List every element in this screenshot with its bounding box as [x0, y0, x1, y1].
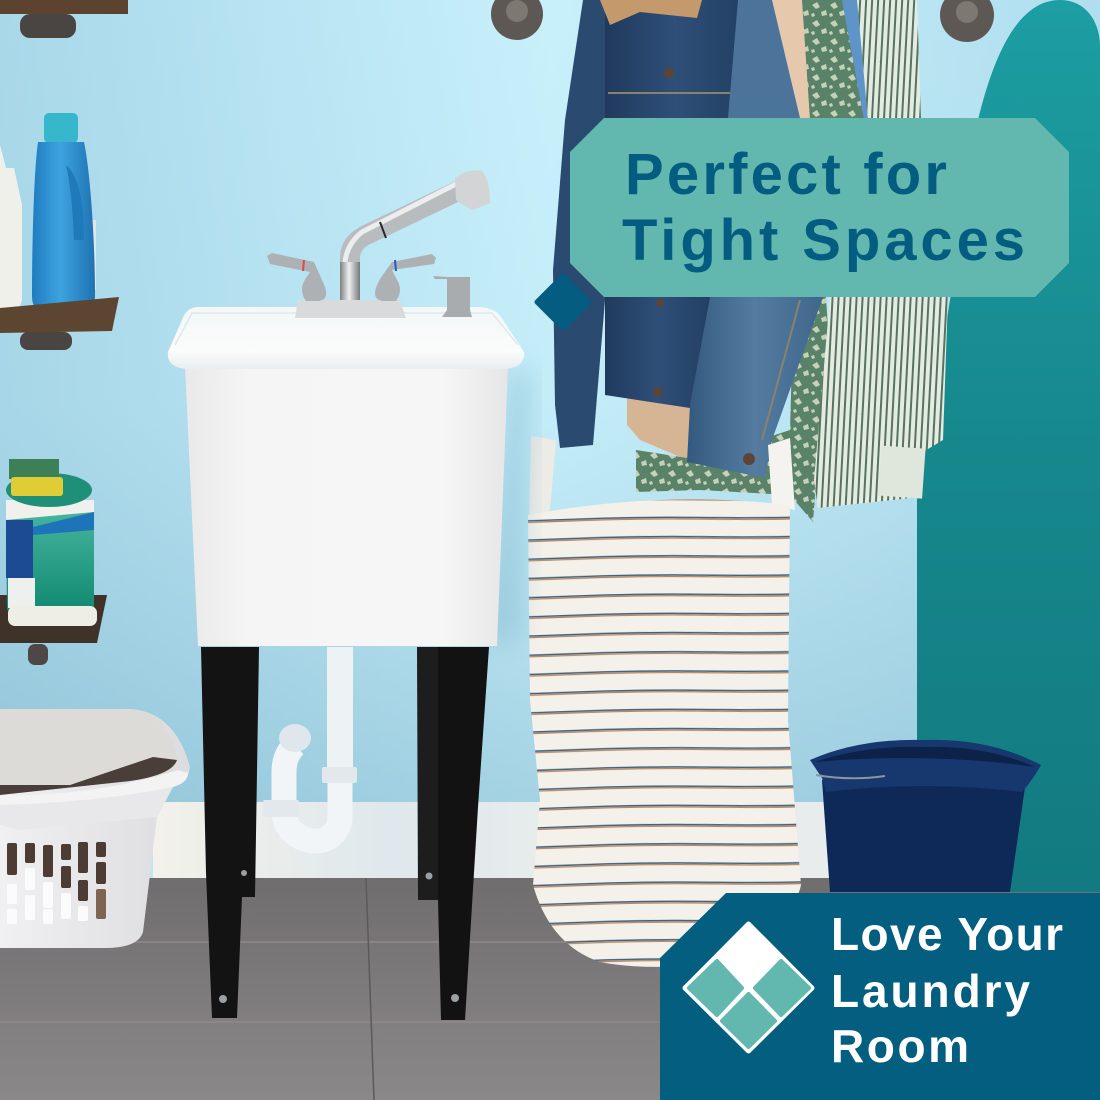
white bottle — [0, 145, 22, 311]
brand name: Love Your — [831, 908, 1063, 960]
floor tiles — [0, 878, 1100, 1100]
leg bolts — [219, 870, 459, 1003]
striped shirt — [857, 0, 921, 120]
leg: left — [201, 647, 259, 1018]
sink shadow on wall — [490, 370, 530, 640]
wipes canister — [6, 459, 97, 626]
brand name: Room — [831, 1020, 969, 1072]
hamper — [528, 436, 801, 967]
sleeve: dark denim — [553, 0, 610, 448]
top shelf — [0, 0, 128, 38]
jacket seam — [608, 93, 800, 440]
faucet — [267, 170, 490, 318]
lower shelf — [0, 595, 107, 665]
cold handle — [375, 254, 436, 301]
baseboard — [153, 802, 833, 879]
heading line 2: Tight Spaces — [622, 208, 1025, 273]
corduroy collar — [600, 0, 702, 25]
wall pipe brackets — [491, 0, 994, 42]
hot and cold rings — [303, 260, 304, 271]
background: laundry room wall — [0, 0, 1100, 810]
drain pipe trap — [263, 647, 357, 841]
brand logo diamonds — [685, 924, 812, 1051]
ironing board — [917, 0, 1100, 892]
heading line 1: Perfect for — [625, 142, 947, 207]
brand name — [831, 908, 1063, 1072]
laundry basket — [0, 709, 190, 948]
brand name: Laundry — [831, 965, 1030, 1017]
brand badge — [660, 893, 1100, 1100]
callout diamond accent — [537, 276, 589, 328]
leg: right — [417, 647, 489, 1020]
hot handle — [267, 253, 326, 301]
callout: Perfect for Tight Spaces — [570, 118, 1069, 297]
faucet spout — [350, 189, 462, 300]
middle shelf — [0, 297, 119, 350]
faucet base plate — [295, 300, 406, 318]
sink legs — [201, 647, 489, 1020]
denim jacket body — [605, 0, 745, 120]
blue shirt — [842, 0, 872, 120]
clothes on rack — [553, 0, 948, 522]
sink tub — [168, 307, 524, 646]
tan shirt — [627, 395, 696, 462]
soap dispenser — [433, 276, 472, 317]
lighter denim sleeve — [728, 0, 800, 118]
faucet head — [455, 170, 490, 210]
jacket buttons — [653, 68, 755, 465]
floral shirt — [636, 0, 865, 522]
tan shirt upper — [772, 0, 810, 120]
blue detergent bottle — [32, 113, 96, 312]
navy bucket — [810, 740, 1041, 892]
